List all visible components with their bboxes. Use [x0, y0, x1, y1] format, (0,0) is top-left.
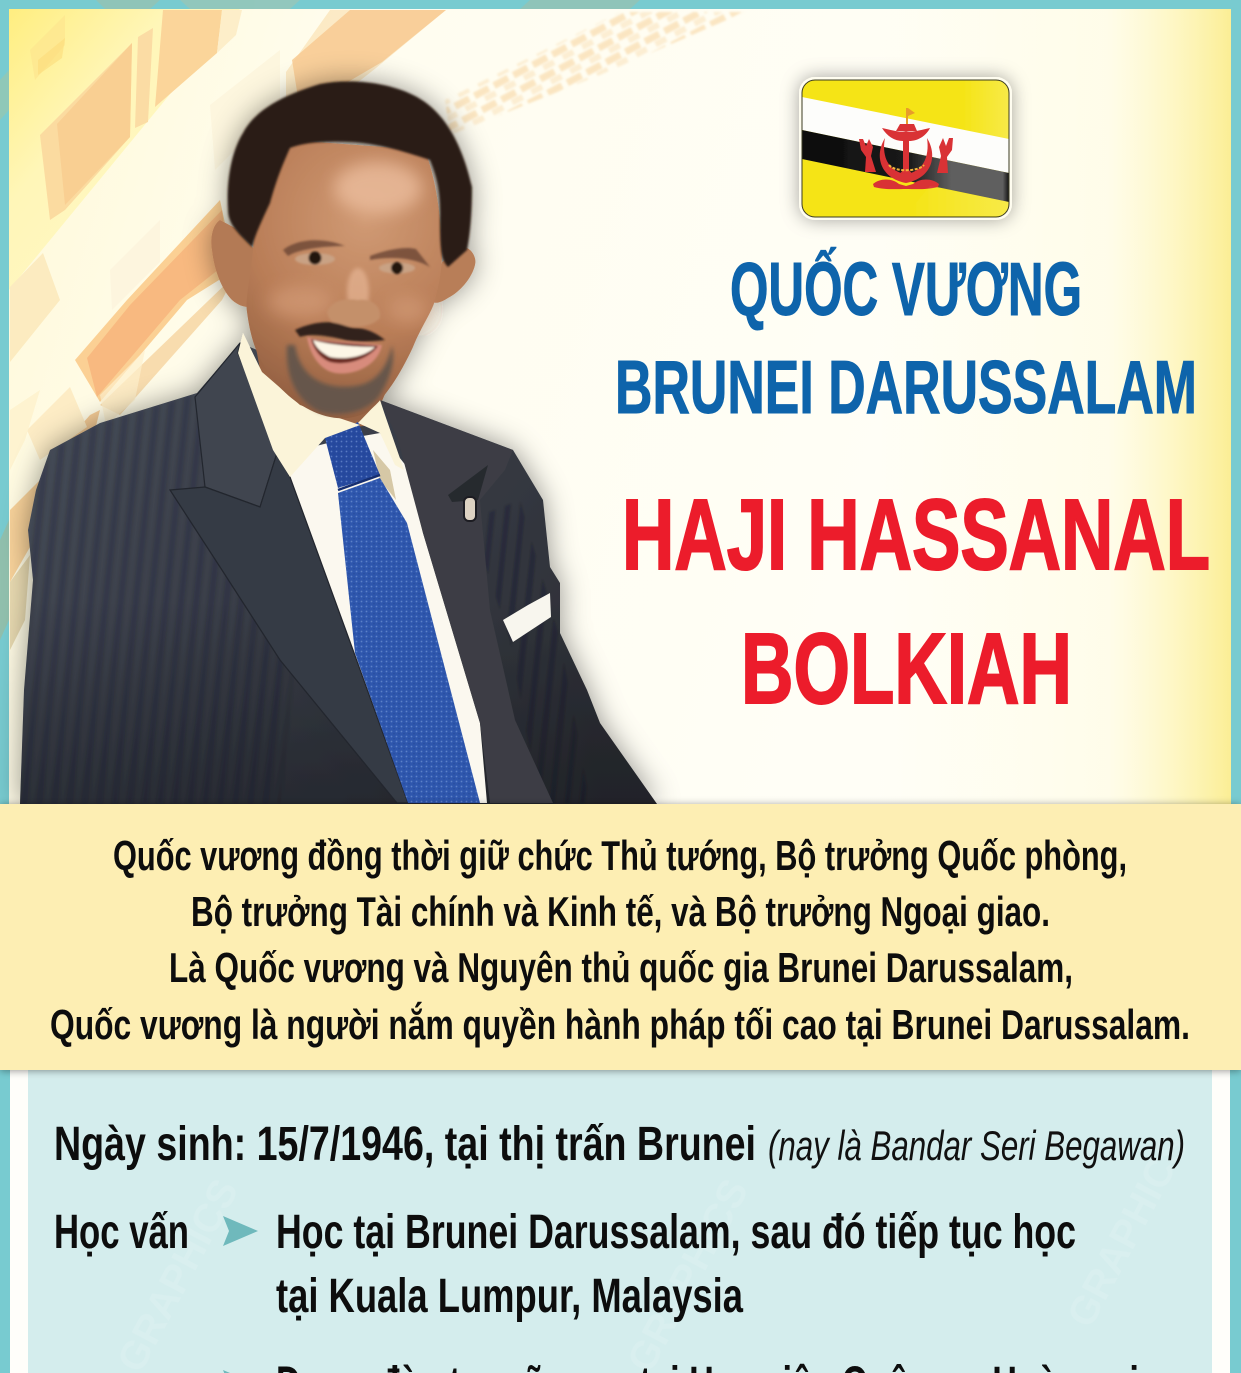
education label: Học vấn [54, 1206, 189, 1259]
nose [327, 299, 380, 327]
left ear [211, 220, 255, 307]
streak tints over the frame [0, 0, 640, 640]
blue tie [325, 422, 480, 803]
panel watermark [109, 1127, 1197, 1373]
right collar [358, 400, 404, 470]
upper left lapel [195, 343, 290, 507]
header background [9, 9, 1231, 809]
education text: tại Kuala Lumpur, Malaysia [276, 1270, 743, 1323]
decorative orange light streaks [9, 9, 745, 650]
right lapel [380, 400, 553, 803]
eyes [295, 253, 335, 265]
lapel pin [464, 497, 476, 521]
face [247, 140, 442, 418]
teeth [313, 340, 375, 358]
education text [276, 1206, 1076, 1323]
title: name in red: BOLKIAH [741, 613, 1072, 725]
flag field [802, 80, 1009, 217]
lips [307, 337, 382, 373]
right ear [433, 248, 475, 303]
black band [802, 130, 1009, 202]
facial shading [268, 162, 428, 324]
flag gloss [971, 80, 1008, 139]
goatee [287, 345, 393, 414]
pocket square [503, 593, 551, 642]
banner text [50, 832, 1190, 1048]
title: Quốc vương Brunei Darussalam [615, 247, 1197, 429]
second arrow icon [223, 1370, 258, 1373]
lower panel light blue field [28, 1068, 1212, 1373]
lower panel frame [10, 1068, 1230, 1373]
crescent inscription [889, 165, 924, 170]
title: name in red [622, 479, 1210, 725]
neck [247, 300, 400, 430]
mustache [295, 322, 385, 342]
facial features [283, 240, 430, 373]
right shirt shade [373, 450, 396, 500]
jacket [20, 343, 660, 804]
eyebrows [283, 240, 345, 256]
hair [228, 81, 472, 267]
birth date line: Ngày sinh: 15/7/1946, tại thị trấn Brunei [54, 1118, 756, 1171]
Brunei flag [799, 77, 1012, 220]
shirt [290, 433, 487, 803]
flag edge [802, 80, 1009, 217]
white band [802, 97, 1009, 173]
left collar [238, 333, 360, 477]
mouth interior [311, 339, 378, 363]
arrow icon [223, 1216, 258, 1246]
roles banner [0, 804, 1241, 1070]
national crest [859, 108, 953, 189]
jacket sleeve folds [480, 727, 553, 803]
portrait of Sultan Hassanal Bolkiah [20, 81, 660, 804]
lower left lapel [170, 453, 408, 803]
panel watermark: GRAPHICS [1059, 1127, 1197, 1334]
